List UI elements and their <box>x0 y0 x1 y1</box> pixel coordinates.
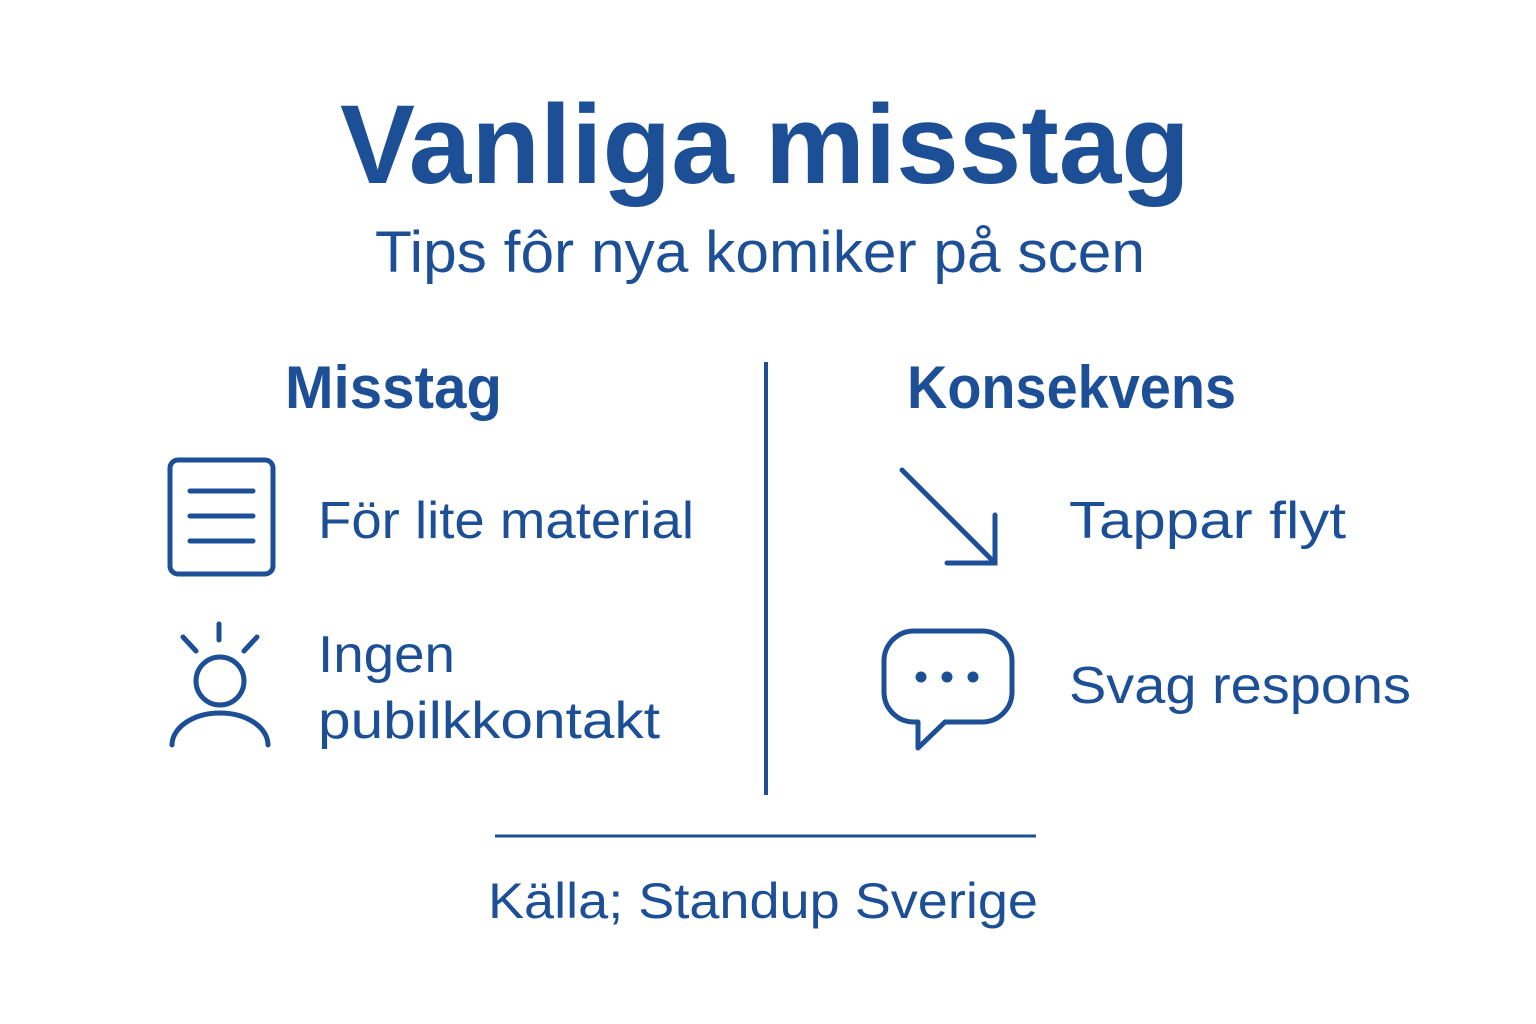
icon: down arrow <box>902 470 995 563</box>
icon: person <box>172 624 268 745</box>
subtitle: Tips fôr nya komiker på scen <box>375 220 1145 285</box>
text: Ingen pubilkkontakt: Ingen <box>318 626 455 684</box>
text: För lite material: För lite material <box>318 492 694 550</box>
text: Ingen pubilkkontakt <box>318 626 661 750</box>
text: Svag respons: Svag respons <box>1069 657 1411 715</box>
text: Ingen pubilkkontakt: pubilkkontakt <box>318 692 661 750</box>
heading: Konsekvens: Konsekvens <box>907 354 1236 421</box>
title: Vanliga misstag <box>340 82 1190 207</box>
icon: document <box>170 460 273 574</box>
text: Tappar flyt: Tappar flyt <box>1069 492 1347 550</box>
source: Källa; Standup Sverige <box>488 873 1038 929</box>
panel: konsekvens <box>884 354 1411 748</box>
icon: speech bubble <box>884 631 1012 748</box>
panel: misstag <box>170 354 694 750</box>
heading: Misstag: Misstag <box>285 354 502 421</box>
